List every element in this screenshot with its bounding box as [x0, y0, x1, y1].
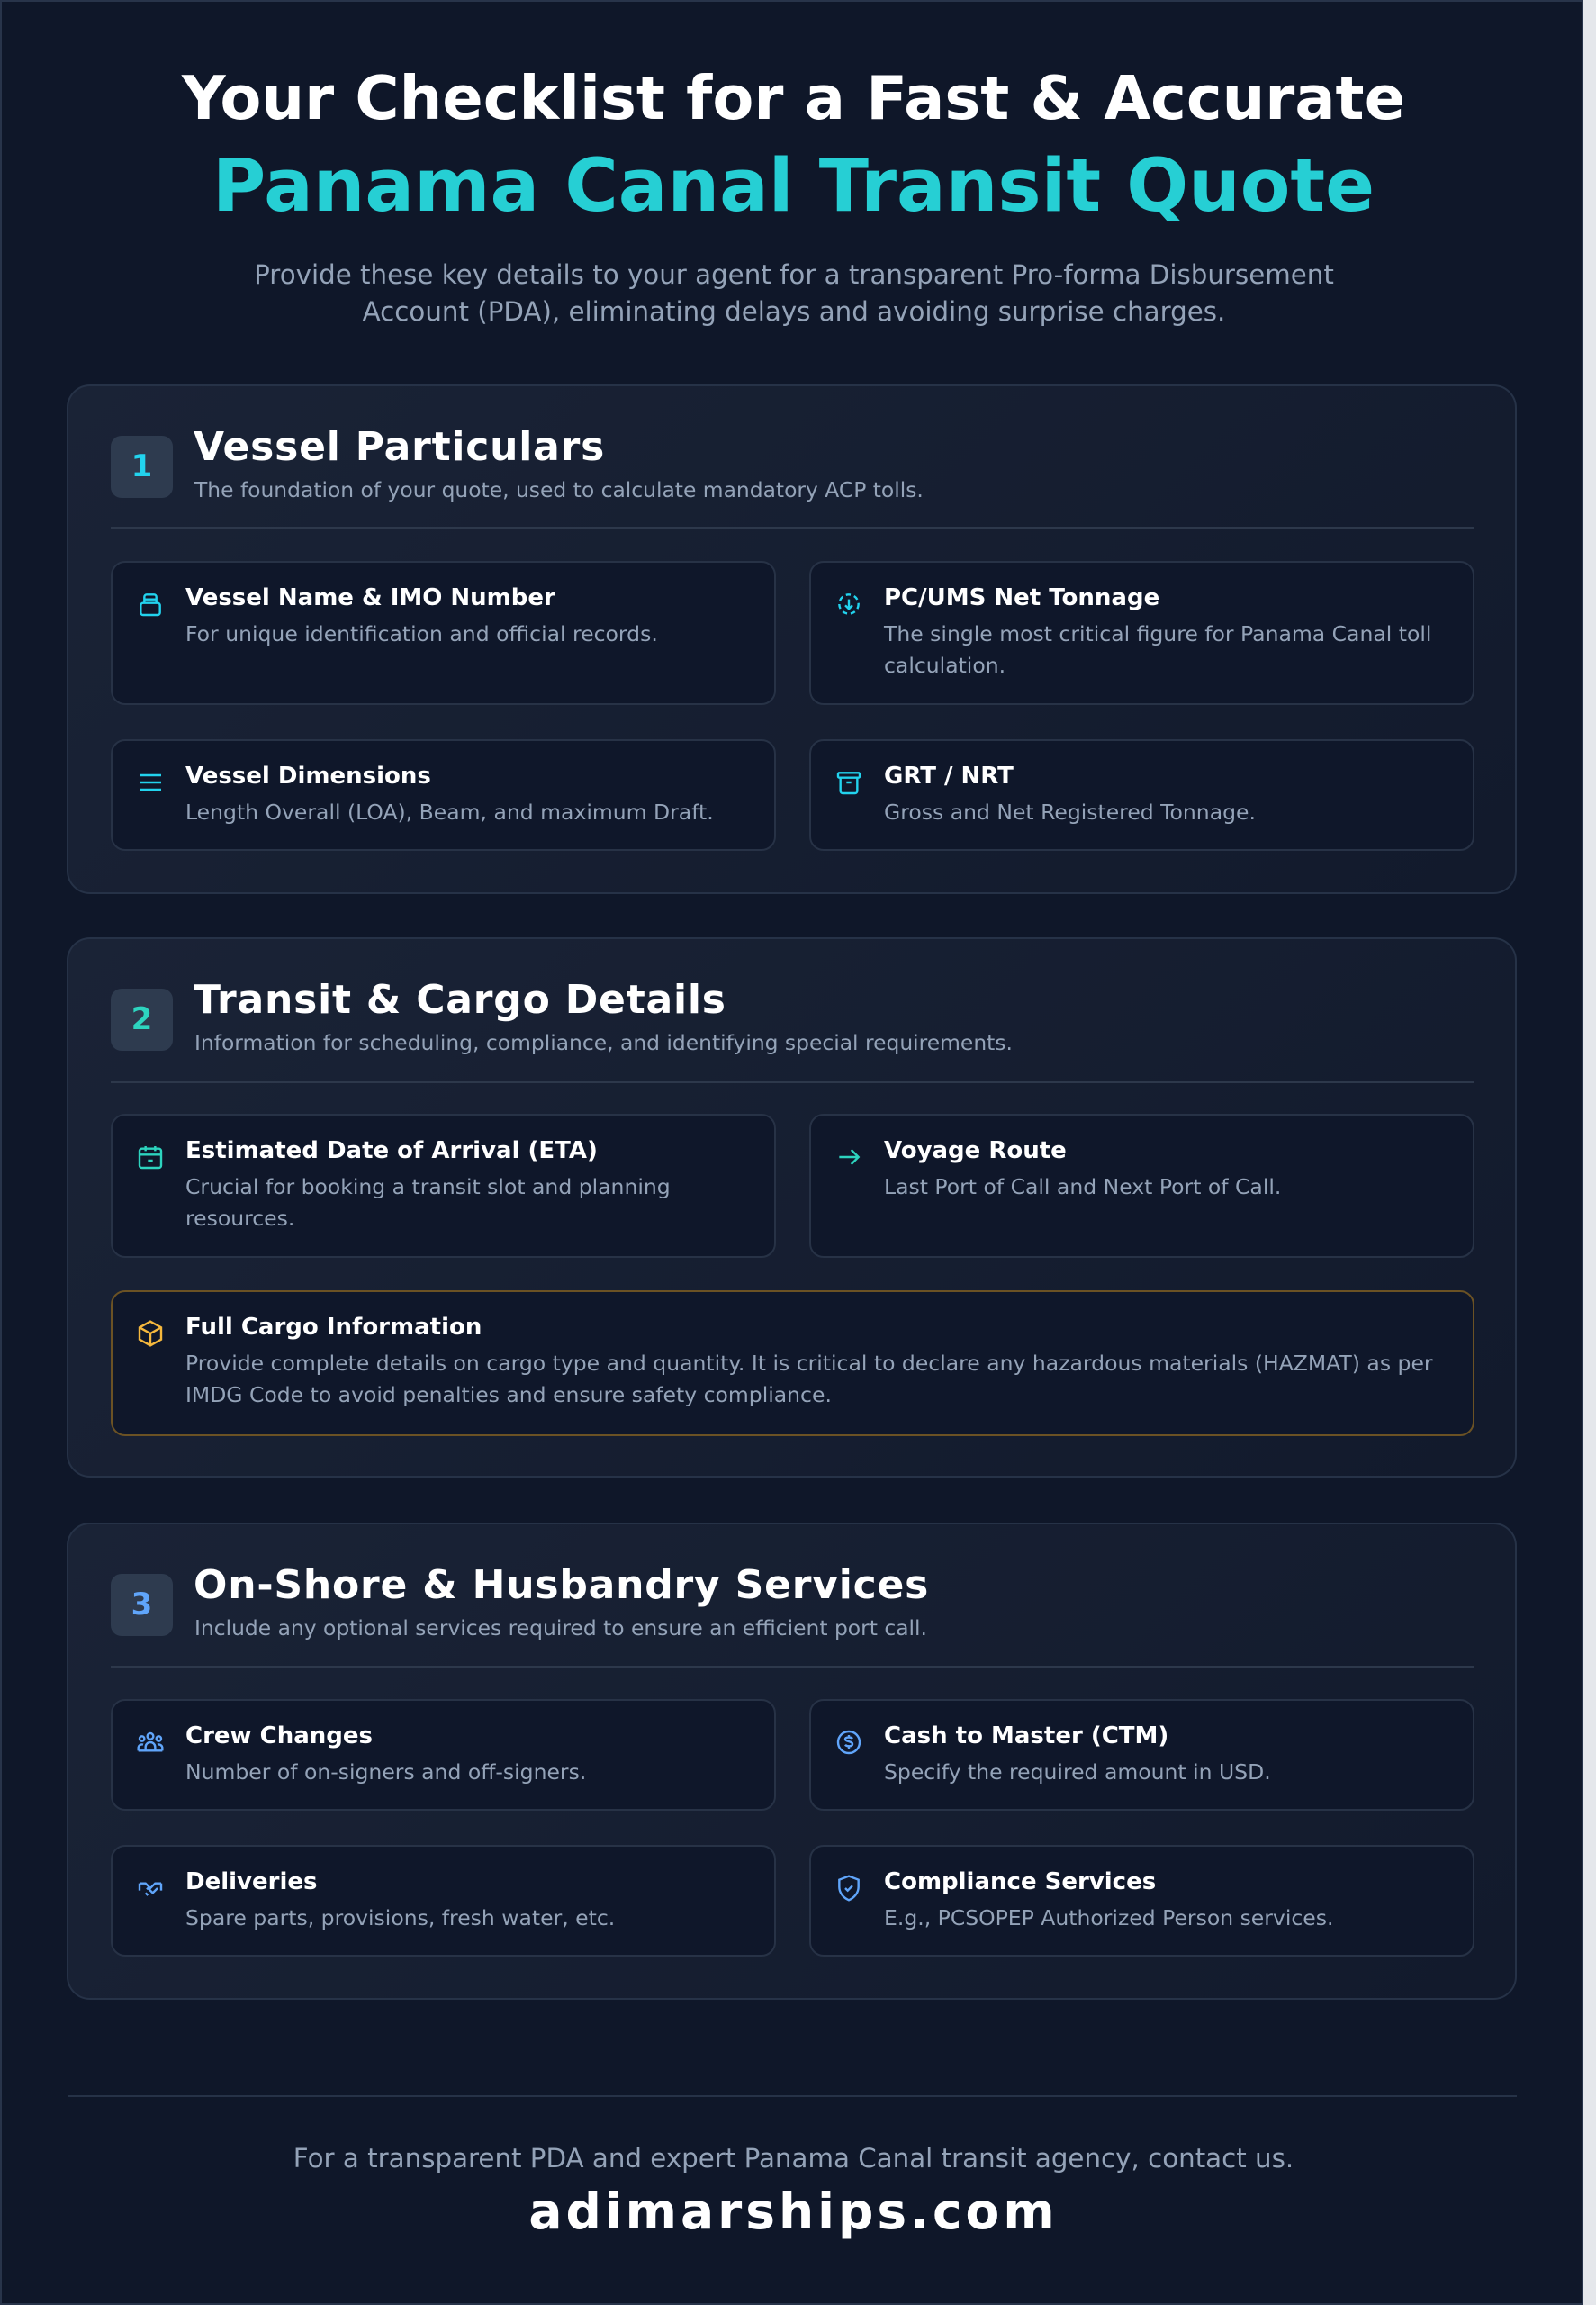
icon: ship — [140, 593, 161, 616]
card: cargo (highlighted) — [111, 1290, 1474, 1436]
card: ETA — [111, 1114, 776, 1258]
icon: lines — [140, 774, 161, 791]
card: compliance: E.g., PCSOPEP Authorized Person services. — [884, 1905, 1333, 1930]
title line 1: Your Checklist for a Fast & Accurate — [182, 63, 1405, 133]
icon: archive — [837, 772, 861, 794]
card: net tonnage — [809, 561, 1474, 705]
heading: Vessel Particulars — [194, 424, 605, 470]
card: deliveries: Deliveries — [185, 1868, 317, 1895]
card: vessel name: For unique identification and official records. — [185, 621, 658, 646]
card: crew: Crew Changes — [185, 1722, 373, 1749]
icon: shield — [838, 1875, 860, 1902]
card: cash to master: Specify the required amount in USD. — [884, 1759, 1271, 1785]
icon: people — [137, 1732, 164, 1752]
card: grt nrt — [809, 739, 1474, 851]
description: Information for scheduling, compliance, and identifying special requirements. — [194, 1030, 1013, 1055]
footer website: adimarships.com — [528, 2183, 1059, 2240]
card: crew: Number of on-signers and off-signers. — [185, 1759, 586, 1785]
card: cargo (highlighted): Full Cargo Information — [185, 1314, 482, 1341]
card: net tonnage: The single most critical figure for Panama Canal toll calculation. — [884, 621, 1431, 678]
card: vessel name — [111, 561, 776, 705]
badge 2 — [111, 989, 173, 1051]
card: ETA: Crucial for booking a transit slot and planning resources. — [185, 1174, 671, 1231]
icon: box — [139, 1320, 162, 1347]
panel: transit & cargo — [67, 937, 1517, 1478]
card: dimensions: Length Overall (LOA), Beam, and maximum Draft. — [185, 800, 714, 825]
card: route — [809, 1114, 1474, 1258]
badge 1 — [111, 436, 173, 498]
card: compliance — [809, 1845, 1474, 1957]
heading: Transit & Cargo Details — [194, 977, 726, 1023]
icon: handshake — [139, 1882, 162, 1896]
panel: husbandry services — [67, 1523, 1517, 2000]
card: ETA: Estimated Date of Arrival (ETA) — [185, 1137, 598, 1164]
footer text: For a transparent PDA and expert Panama Canal transit agency, contact us. — [293, 2143, 1294, 2174]
card: compliance: Compliance Services — [884, 1868, 1156, 1895]
heading: On-Shore & Husbandry Services — [194, 1562, 929, 1608]
description: The foundation of your quote, used to calculate mandatory ACP tolls. — [194, 477, 924, 502]
card: dimensions: Vessel Dimensions — [185, 763, 431, 790]
card: cargo (highlighted): Provide complete details on cargo type and quantity. It is critical to declare any hazardous materials (HAZMAT) as per IMDG Code to avoid penalties and ensure safety compliance. — [185, 1351, 1433, 1407]
badge 3: 3 — [131, 1586, 152, 1623]
description: Include any optional services required to ensure an efficient port call. — [194, 1615, 927, 1641]
card: dimensions — [111, 739, 776, 851]
subtitle: Provide these key details to your agent for a transparent Pro-forma Disbursement Account (PDA), eliminating delays and avoiding surprise charges. — [254, 259, 1334, 327]
icon: dashed circle — [838, 593, 860, 615]
icon: dollar — [837, 1731, 861, 1754]
card: deliveries — [111, 1845, 776, 1957]
title line 2: Panama Canal Transit Quote — [212, 144, 1375, 229]
card: grt nrt: GRT / NRT — [884, 763, 1014, 790]
card: deliveries: Spare parts, provisions, fresh water, etc. — [185, 1905, 615, 1930]
badge 2: 2 — [131, 1001, 152, 1037]
card: route: Voyage Route — [884, 1137, 1067, 1164]
card: vessel name: Vessel Name & IMO Number — [185, 584, 555, 611]
card: route: Last Port of Call and Next Port of Call. — [884, 1174, 1281, 1199]
icon: arrow — [839, 1149, 861, 1165]
card: grt nrt: Gross and Net Registered Tonnage. — [884, 800, 1256, 825]
badge 1: 1 — [131, 448, 152, 484]
card: crew — [111, 1699, 776, 1811]
icon: calendar — [139, 1146, 162, 1169]
card: net tonnage: PC/UMS Net Tonnage — [884, 584, 1159, 611]
card: cash to master: Cash to Master (CTM) — [884, 1722, 1168, 1749]
badge 3 — [111, 1574, 173, 1636]
panel: vessel particulars — [67, 384, 1517, 894]
card: cash to master — [809, 1699, 1474, 1811]
